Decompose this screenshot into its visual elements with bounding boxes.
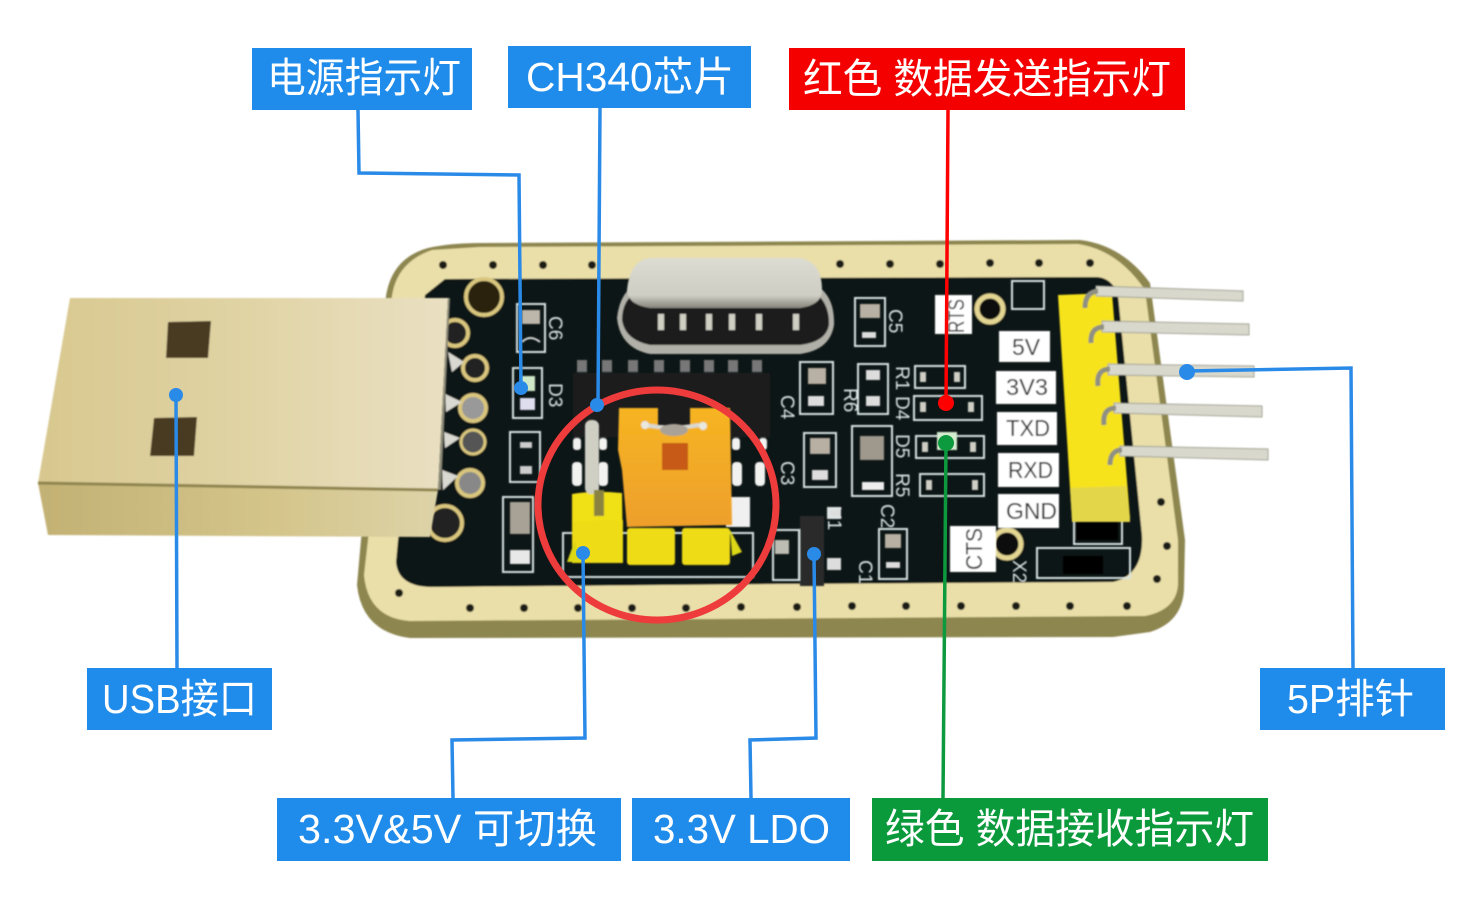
label: 3.3V LDO xyxy=(632,798,850,861)
label: red TX LED: 红色 数据发送指示灯 xyxy=(803,56,1171,102)
red highlight circle xyxy=(538,390,776,620)
label: green RX LED: 绿色 数据接收指示灯 xyxy=(885,806,1254,852)
label: 5P header: 5P排针 xyxy=(1287,676,1414,722)
leader line: 5P header xyxy=(1179,364,1353,668)
jumper and yellow header xyxy=(567,408,742,565)
leader line: LDO xyxy=(750,547,821,798)
SMD components and silkscreen: U1 xyxy=(823,506,844,530)
SMD components and silkscreen: R1 xyxy=(891,366,912,390)
silkscreen pin labels: RXD xyxy=(1008,457,1053,483)
leader line: TX LED xyxy=(938,110,954,411)
via dots xyxy=(395,259,1171,612)
SMD components and silkscreen: C5 xyxy=(884,309,905,333)
SMD components and silkscreen: C4 xyxy=(776,395,797,420)
USB connector xyxy=(38,298,450,537)
label: USB port: USB接口 xyxy=(102,676,257,722)
SMD components and silkscreen xyxy=(503,281,1130,586)
SMD components and silkscreen: C1 xyxy=(854,560,875,584)
SMD components and silkscreen: D4 xyxy=(891,396,912,421)
leader line: voltage jumper xyxy=(452,546,590,798)
label: CH340 chip xyxy=(508,46,751,108)
leader line: RX LED xyxy=(938,435,954,798)
label: 3.3V and 5V switchable xyxy=(277,798,621,861)
silkscreen pin labels xyxy=(935,295,1059,572)
5P pin header xyxy=(1058,286,1268,522)
crystal oscillator xyxy=(617,258,834,354)
label: USB port xyxy=(87,668,272,730)
SMD components and silkscreen: D3 xyxy=(544,383,565,407)
SMD components and silkscreen: C6 xyxy=(544,316,565,340)
silkscreen pin labels: GND xyxy=(1006,498,1057,524)
silkscreen pin labels: 3V3 xyxy=(1006,374,1048,400)
silkscreen pin labels: TXD xyxy=(1006,415,1050,441)
label: power LED xyxy=(252,48,472,110)
label: 3.3V LDO: 3.3V LDO xyxy=(653,806,830,852)
SMD components and silkscreen: D5 xyxy=(891,434,912,458)
leader line: power LED xyxy=(358,110,528,395)
label: power LED: 电源指示灯 xyxy=(267,55,461,101)
leader line: USB port xyxy=(169,388,183,668)
silkscreen pin labels: 5V xyxy=(1012,334,1041,360)
PCB board xyxy=(357,240,1185,638)
SMD components and silkscreen: C2 xyxy=(876,504,897,528)
label: 5P header xyxy=(1260,668,1445,730)
label: 3.3V and 5V switchable: 3.3V&5V 可切换 xyxy=(298,806,597,852)
SMD components and silkscreen: X2 xyxy=(1008,560,1029,583)
leader line: CH340 chip xyxy=(590,108,604,412)
SMD components and silkscreen: R6 xyxy=(839,388,860,412)
silkscreen pin labels: RTS xyxy=(943,299,969,333)
label: CH340 chip: CH340芯片 xyxy=(526,54,734,100)
SMD components and silkscreen: C3 xyxy=(776,461,797,485)
SMD components and silkscreen: R5 xyxy=(891,473,912,497)
silkscreen pin labels: CTS xyxy=(961,528,987,570)
